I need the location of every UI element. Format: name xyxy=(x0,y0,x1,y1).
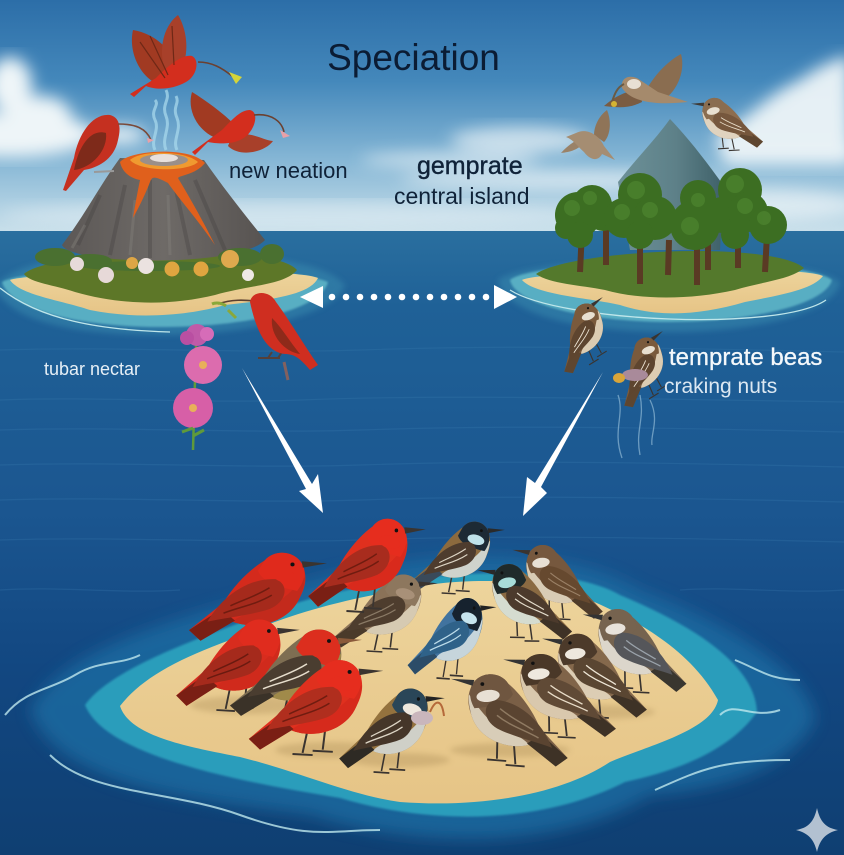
bird: brown sparrow front xyxy=(439,669,578,773)
bird: grey-brown far right xyxy=(575,605,693,697)
bird: flying small brown sparrow xyxy=(561,110,615,160)
sand beach xyxy=(10,271,318,315)
bird: red back left xyxy=(189,553,327,646)
bird: striped brown lower xyxy=(495,650,624,742)
island water halo xyxy=(498,260,840,332)
bird: flying brown sparrow top xyxy=(604,54,688,107)
flowers xyxy=(70,250,254,283)
sand beach xyxy=(522,269,823,313)
trees xyxy=(555,168,787,285)
bird: brown sparrow cracking nuts xyxy=(598,326,691,458)
sky xyxy=(0,0,844,232)
water halo xyxy=(30,556,815,839)
bird: flying red honeycreeper middle xyxy=(191,92,290,155)
grass xyxy=(24,251,297,303)
bird: blue-head brown xyxy=(411,522,505,594)
label: tubar nectar: tubar nectar xyxy=(44,359,140,379)
mountain xyxy=(618,119,724,250)
bird: red-headed olive xyxy=(230,630,362,721)
grass xyxy=(536,251,804,298)
bird: brown sparrow above water xyxy=(538,292,631,379)
sand xyxy=(120,581,718,803)
bird: brown tan belly xyxy=(332,574,438,652)
label: gemprate central island: central island xyxy=(394,183,530,209)
arrow: right island to central island xyxy=(523,372,603,516)
label: craking nuts: craking nuts xyxy=(664,375,777,398)
bird: flying red honeycreeper top xyxy=(130,15,242,97)
label: temprate beas: temprate beas xyxy=(669,344,822,371)
panel: left volcanic island xyxy=(0,152,345,335)
title: Speciation xyxy=(327,37,500,78)
label: gemprate central island xyxy=(394,152,530,209)
group: brown and blue birds xyxy=(332,522,693,773)
water ripple lines xyxy=(5,655,800,832)
arrow: left island to central island xyxy=(242,368,323,513)
group: red birds xyxy=(176,519,426,755)
icon: pink nectar flowers xyxy=(173,324,222,450)
label: new neation: new neation xyxy=(229,158,348,183)
arrow: dotted two-way migration xyxy=(300,285,517,309)
bird: teal-cheek brown facing left xyxy=(473,562,576,644)
bird: red front xyxy=(249,660,383,755)
steam xyxy=(154,90,178,150)
bird: perched red honeycreeper xyxy=(63,115,154,191)
volcano xyxy=(62,152,265,261)
icon: sparkle watermark xyxy=(796,808,838,852)
plants xyxy=(35,244,284,271)
bird: red honeycreeper sipping nectar xyxy=(212,293,318,380)
clouds xyxy=(0,55,844,229)
panel: right temperate island xyxy=(498,119,840,332)
shadows xyxy=(190,696,655,767)
bird: striped brown xyxy=(533,630,655,723)
bird: perched brown sparrow top xyxy=(691,98,763,151)
sea xyxy=(0,231,844,855)
label: gemprate central island: gemprate xyxy=(417,152,523,180)
panel: central island xyxy=(5,519,815,839)
bird: blue xyxy=(408,598,496,679)
bird: blue-head with nut xyxy=(339,689,445,773)
bird: red back centre xyxy=(308,519,426,612)
bird: red left xyxy=(176,620,300,711)
island water halo xyxy=(0,255,345,335)
lava xyxy=(120,152,215,245)
sea wave texture xyxy=(0,347,844,591)
bird: brown white-throat back right xyxy=(506,542,609,624)
